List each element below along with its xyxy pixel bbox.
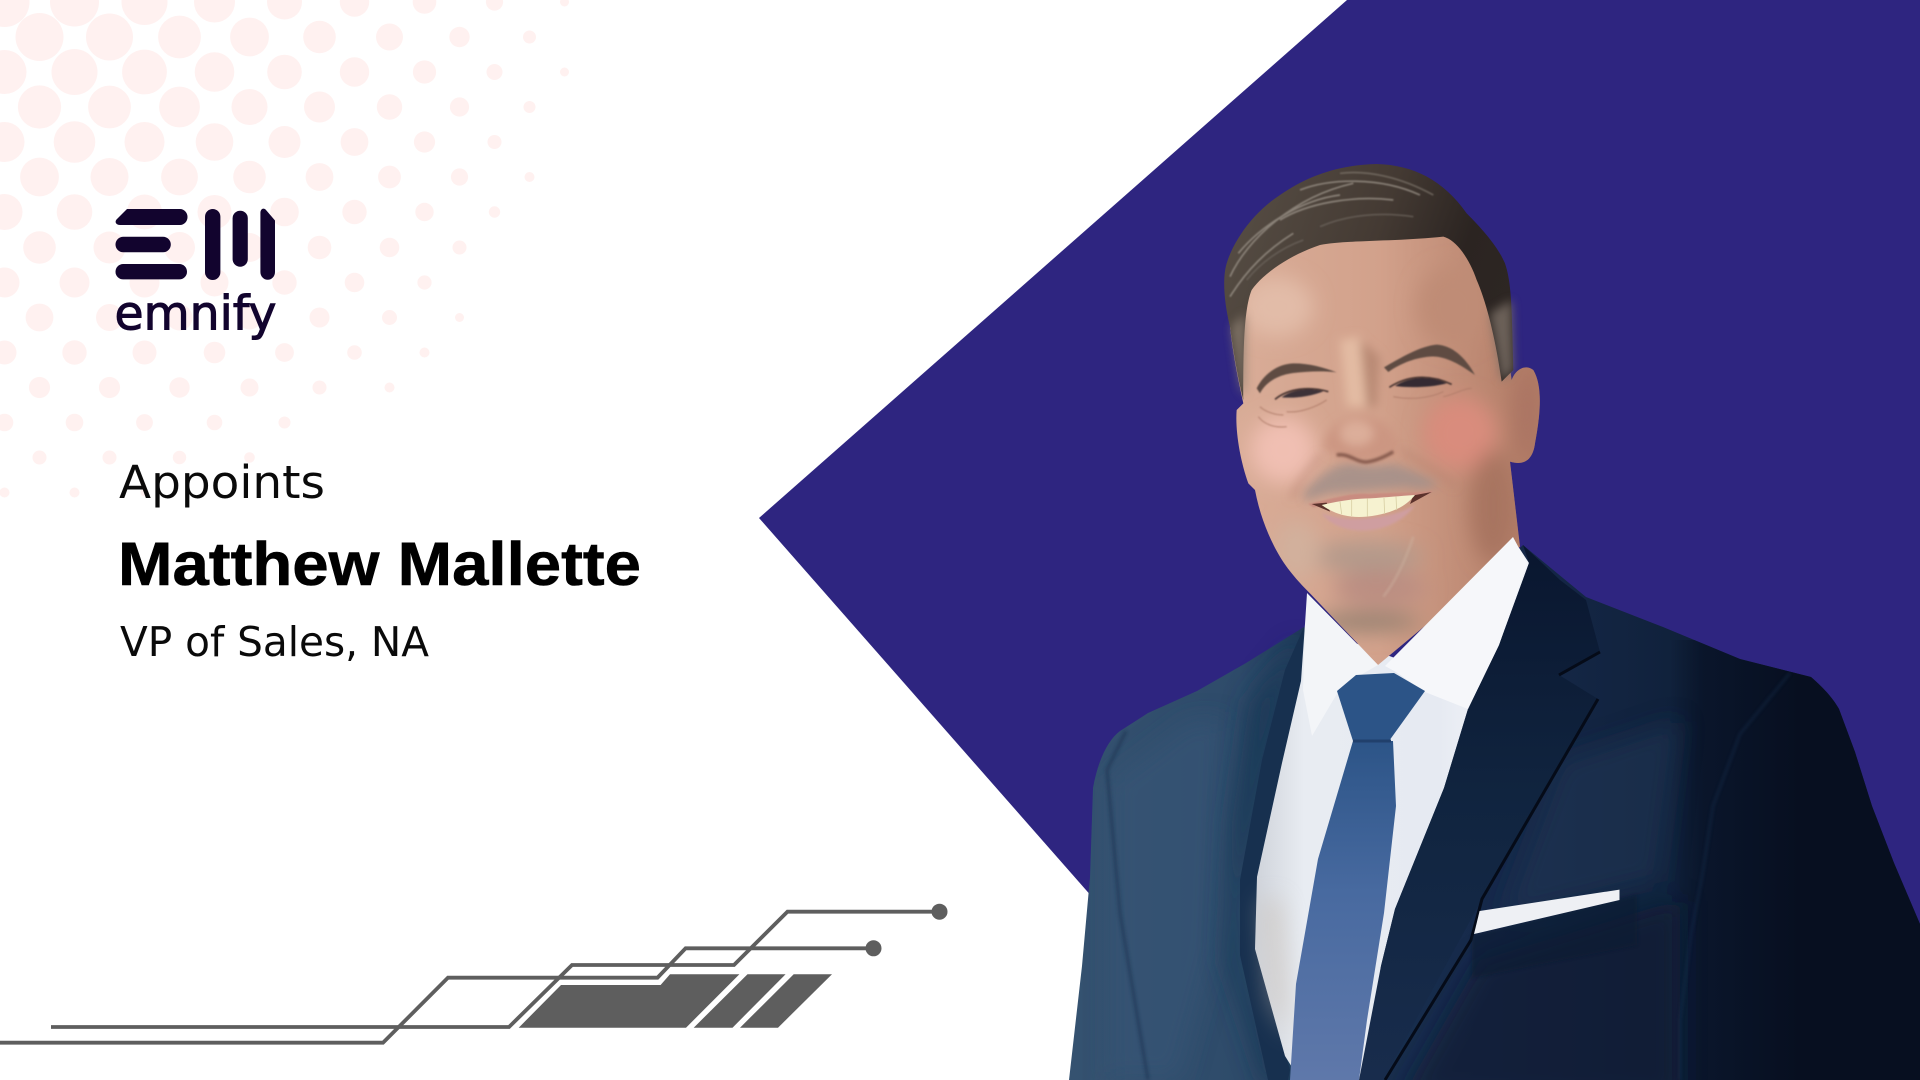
- circuit line graphic: [0, 904, 948, 1043]
- hair: [1224, 164, 1513, 400]
- navy triangle panel: [759, 0, 1920, 1080]
- text: VP of Sales, NA: VP of Sales, NA: [120, 618, 429, 666]
- suit shading: [1404, 732, 1674, 1080]
- halftone dot pattern: [0, 0, 569, 498]
- logo: emnify: [114, 209, 276, 342]
- shirt collar: [1303, 537, 1527, 736]
- pocket square: [1474, 890, 1620, 934]
- right lapel edge: [1385, 652, 1600, 1080]
- nostril shadow: [1337, 452, 1393, 462]
- mouth: [1308, 491, 1433, 531]
- jacket sleeve: [1670, 640, 1920, 1080]
- left lapel shadow: [1225, 640, 1300, 1080]
- sleeve seam, left: [1107, 731, 1148, 1080]
- teeth: [1322, 495, 1415, 517]
- chin light: [1383, 537, 1413, 597]
- logo wordmark: emnify: [114, 286, 276, 342]
- text: Appoints: Appoints: [119, 456, 325, 509]
- tooth gaps: [1340, 497, 1397, 517]
- stubble above lip: [1303, 463, 1440, 502]
- tie knot: [1337, 673, 1425, 741]
- hair streaks: [1230, 173, 1433, 297]
- mouth corners: [1312, 492, 1432, 512]
- face and neck: [1230, 207, 1540, 665]
- slanted blocks: [519, 974, 832, 1028]
- eye wrinkles: [1258, 388, 1472, 427]
- suit jacket: [1060, 530, 1920, 1080]
- face colour shading: [1240, 267, 1540, 631]
- eyebrows: [1257, 345, 1475, 393]
- circuit traces: [0, 912, 932, 1043]
- nose and forehead modelling: [1324, 336, 1390, 458]
- portrait: man in navy suit: [1060, 164, 1920, 1080]
- circuit end dots: [866, 904, 948, 956]
- tie blade: [1290, 741, 1396, 1080]
- head: [1224, 164, 1540, 665]
- right lapel: [1359, 545, 1600, 1080]
- tie knot shadow: [1353, 740, 1391, 742]
- left lapel edge: [1240, 627, 1304, 1080]
- faded hair sides: [1232, 300, 1513, 397]
- sleeve seam, right: [1696, 674, 1790, 912]
- heading: Matthew Mallette: Matthew Mallette: [118, 530, 641, 599]
- logo mark: E and M bars: [116, 209, 275, 280]
- shirt: [1255, 537, 1529, 1080]
- shirt shadow: [1262, 900, 1290, 1040]
- eyes: [1275, 377, 1452, 399]
- upper lip: [1308, 491, 1433, 507]
- lower lip: [1322, 505, 1415, 531]
- smile creases: [1292, 458, 1319, 494]
- breast pocket: [1472, 895, 1637, 978]
